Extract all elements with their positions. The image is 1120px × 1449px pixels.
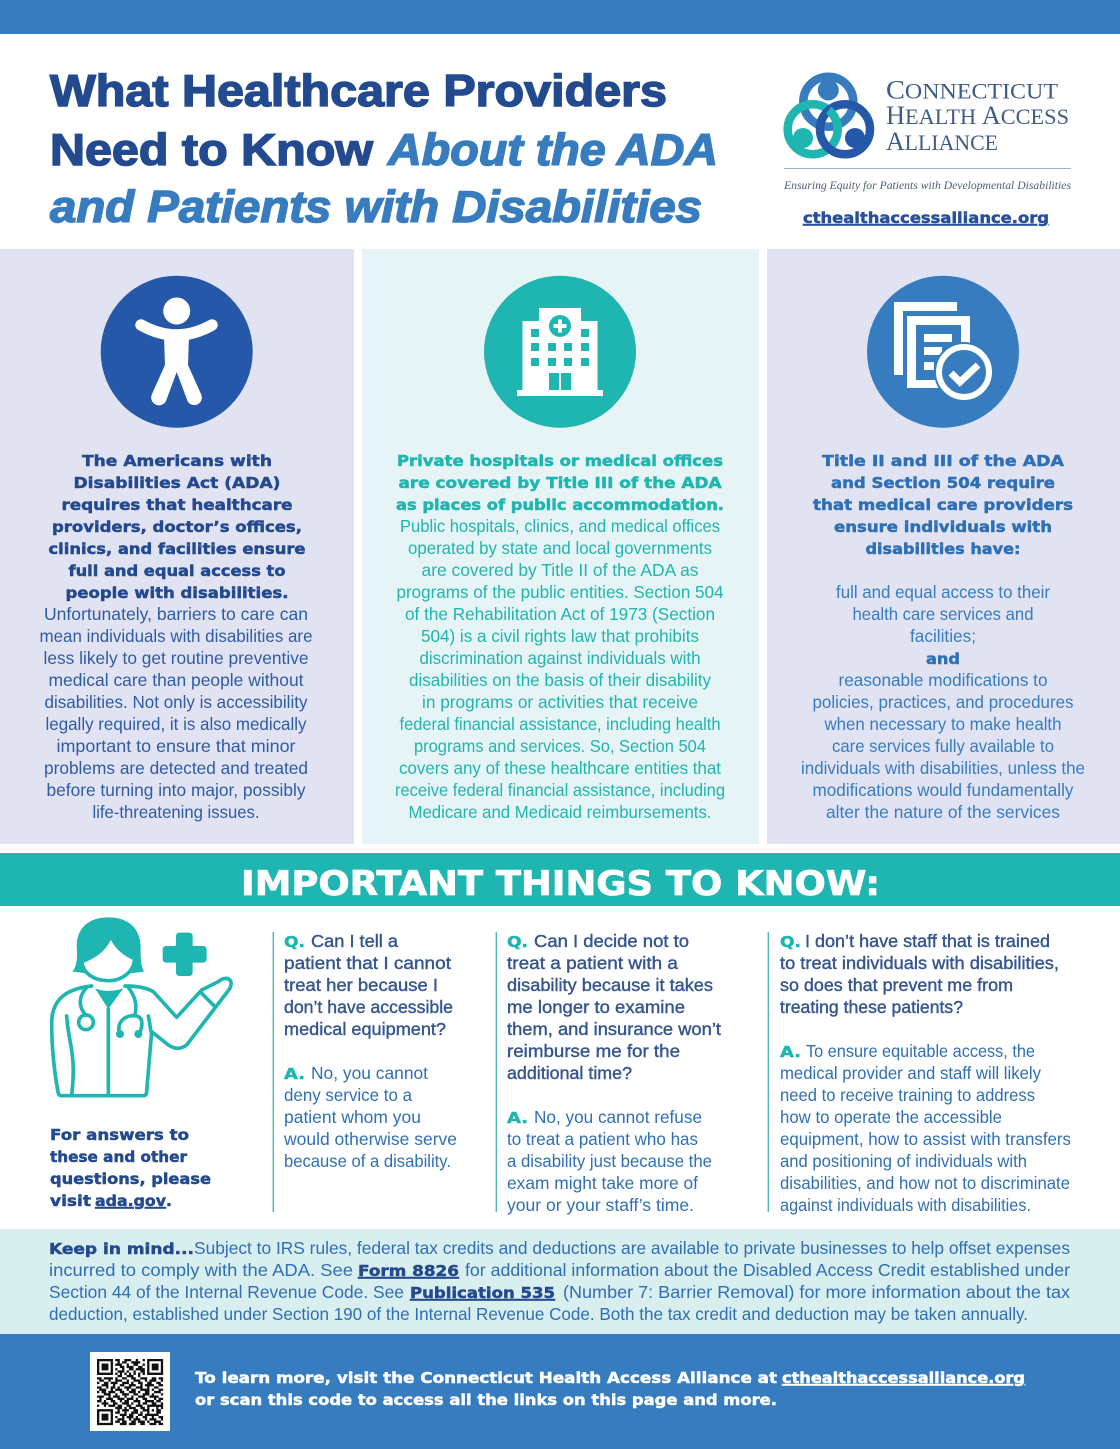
text: for answers visit ada.gov: ada.gov [95,1192,166,1210]
answer 3: need to receive training to address [780,1085,1035,1105]
title [50,67,718,232]
answer 3: disabilities, and how not to discriminate [780,1173,1070,1193]
text: for answers visit ada.gov: these and other [50,1148,187,1166]
body text: mean individuals with disabilities are [40,626,312,646]
body text [40,604,312,822]
body text: 504) is a civil rights law that prohibits [421,626,699,646]
icon: three linked rings [788,77,870,154]
question and answer 3 [768,931,1071,1215]
body text: disabilities. Not only is accessibility [44,692,308,712]
title: and Patients with Disabilities [50,183,702,232]
question 3: treating these patients? [780,997,963,1017]
panel: keep in mind: Form 8826 [358,1262,459,1280]
question 1: don’t have accessible [284,997,453,1017]
answer 3: and positioning of individuals with [780,1151,1027,1171]
heading text [813,452,1073,558]
panel: covered entities [362,249,759,844]
question 3: to treat individuals with disabilities, [780,953,1059,973]
body text: problems are detected and treated [44,758,308,778]
question 3: Q. [780,933,801,951]
body text: Unfortunately, barriers to care can [44,604,308,624]
question 1: patient that I cannot [284,953,451,973]
body text: policies, practices, and procedures [812,692,1074,712]
body text: before turning into major, possibly [46,780,306,800]
heading text [396,452,724,514]
title: Need to Know [50,126,373,175]
question 2 [507,931,721,1083]
panel: keep in mind: for additional information about the Disabled Access Credit established under [465,1260,1070,1280]
answer 3: against individuals with disabilities. [780,1195,1031,1215]
text: for answers visit ada.gov: visit [50,1192,92,1210]
website link: cthealthaccessalliance.org [803,209,1049,227]
answer 1: would otherwise serve [283,1129,457,1149]
footer [0,1334,1120,1449]
question 1: treat her because I [284,975,438,995]
heading text: Private hospitals or medical offices [397,452,723,470]
body text: Medicare and Medicaid reimbursements. [408,802,712,822]
banner: important things to know [0,853,1120,906]
QR code [90,1352,170,1431]
answer 1: because of a disability. [284,1151,451,1171]
question 3 [780,931,1059,1017]
icon: documents with checkmark [867,276,1019,428]
body text: health care services and [852,604,1034,624]
answer 3: equipment, how to assist with transfers [780,1129,1071,1149]
footer call to action [195,1369,1025,1409]
body text: individuals with disabilities, unless the [801,758,1085,778]
logo block [783,76,1071,227]
footer call to action: cthealthaccessalliance.org [782,1369,1025,1387]
panel: keep in mind: Publication 535 [410,1284,555,1302]
panel: keep in mind: Section 44 of the Internal Revenue Code. See [49,1282,404,1302]
heading text: ensure individuals with [834,518,1052,536]
body text: receive federal financial assistance, including [395,780,725,800]
text: for answers visit ada.gov: For answers to [50,1126,189,1144]
footer call to action: To learn more, visit the Connecticut Health Access Alliance at [195,1369,778,1387]
panel: keep in mind: Subject to IRS rules, federal tax credits and deductions are available to private businesses to help offset expenses [194,1238,1070,1258]
answer 2: a disability just because the [507,1151,712,1171]
answer 3: A. [780,1043,801,1061]
body text: programs and services. So, Section 504 [414,736,706,756]
organisation name: ALLIANCE [886,127,998,156]
body text: disabilities on the basis of their disability [409,670,711,690]
heading text: that medical care providers [813,496,1073,514]
question 1: Q. [284,933,305,951]
panel: Title II, III and Section 504 [767,249,1120,844]
heading text: Disabilities Act (ADA) [74,474,280,492]
body text: life-threatening issues. [92,802,260,822]
heading text: The Americans with [82,452,272,470]
heading text: disabilities have: [866,540,1020,558]
panel: keep in mind: incurred to comply with the ADA. See [49,1260,353,1280]
title: About the ADA [387,126,718,175]
body text [801,582,1085,822]
icon: accessibility figure [101,276,253,428]
organisation name: CONNECTICUT [886,76,1059,104]
heading text: Title II and III of the ADA [822,452,1064,470]
question 1: Can I tell a [311,931,398,951]
answer 3: medical provider and staff will likely [780,1063,1041,1083]
body text: of the Rehabilitation Act of 1973 (Section [405,604,715,624]
question 2: Can I decide not to [534,931,689,951]
body text: less likely to get routine preventive [44,648,308,668]
body text: covers any of these healthcare entities that [399,758,721,778]
top bar [0,0,1120,34]
answer 2: your or your staff’s time. [507,1195,694,1215]
banner: important things to know: IMPORTANT THINGS TO KNOW: [241,864,880,904]
question 2: treat a patient with a [507,953,678,973]
text: for answers visit ada.gov [50,1126,211,1210]
answer 2: No, you cannot refuse [534,1107,702,1127]
answer 1 [283,1063,457,1171]
heading text: are covered by Title III of the ADA [398,474,722,492]
heading text: and Section 504 require [831,474,1055,492]
body text: and [926,650,960,668]
body text: programs of the public entities. Section 504 [396,582,724,602]
organisation name [886,76,1069,156]
answer 1: deny service to a [284,1085,412,1105]
icon: doctor with medical cross [52,917,231,1096]
text: for answers visit ada.gov: . [166,1192,172,1210]
body text: operated by state and local governments [408,538,712,558]
body text: discrimination against individuals with [420,648,700,668]
answer 1: A. [284,1065,305,1083]
question 3: so does that prevent me from [780,975,1013,995]
panel: keep in mind: deduction, established under Section 190 of the Internal Revenue Code. Both the tax credit and deduction may be taken annually. [49,1304,1028,1324]
question 2: disability because it takes [507,975,713,995]
heading text: people with disabilities. [66,584,288,602]
body text [395,516,725,822]
question 2: me longer to examine [507,997,685,1017]
body text: alter the nature of the services [826,802,1060,822]
body text: modifications would fundamentally [812,780,1074,800]
footer call to action: or scan this code to access all the links on this page and more. [195,1391,777,1409]
body text: Public hospitals, clinics, and medical offices [400,516,720,536]
body text: are covered by Title II of the ADA as [422,560,699,580]
heading text: as places of public accommodation. [396,496,724,514]
body text: important to ensure that minor [56,736,296,756]
answer 3: how to operate the accessible [780,1107,1002,1127]
answer 2: exam might take more of [507,1173,698,1193]
body text: when necessary to make health [824,714,1062,734]
panel: keep in mind [0,1229,1120,1334]
title: What Healthcare Providers [50,67,667,116]
heading text: providers, doctor’s offices, [52,518,302,536]
heading text: requires that healthcare [62,496,292,514]
icon: hospital [484,276,636,428]
question 1: medical equipment? [284,1019,446,1039]
answer 1: patient whom you [284,1107,421,1127]
answer 1: No, you cannot [311,1063,428,1083]
panel: keep in mind: Keep in mind... [49,1240,194,1258]
body text: facilities; [910,626,976,646]
body text: reasonable modifications to [838,670,1048,690]
text: for answers visit ada.gov: questions, please [50,1170,211,1188]
tagline: Ensuring Equity for Patients with Developmental Disabilities [783,178,1071,192]
answer 3 [780,1041,1071,1215]
question 2: reimburse me for the [507,1041,680,1061]
question 1 [284,931,453,1039]
heading text: clinics, and facilities ensure [48,540,306,558]
answer 2 [507,1107,712,1215]
heading text [48,452,306,602]
answer 3: To ensure equitable access, the [806,1041,1035,1061]
question 2: them, and insurance won’t [507,1019,721,1039]
heading text: full and equal access to [68,562,286,580]
question and answer 1 [273,931,457,1212]
question 3: I don’t have staff that is trained [805,931,1050,951]
answer 2: to treat a patient who has [507,1129,698,1149]
body text: care services fully available to [832,736,1054,756]
body text: federal financial assistance, including health [400,714,720,734]
body text: legally required, it is also medically [46,714,307,734]
question 2: Q. [507,933,528,951]
organisation name: HEALTH ACCESS [886,101,1069,130]
panel: keep in mind: (Number 7: Barrier Removal) for more information about the tax [563,1282,1070,1302]
question 2: additional time? [507,1063,632,1083]
panel: the ADA [0,249,354,844]
body text: full and equal access to their [836,582,1050,602]
question and answer 2 [496,931,721,1215]
answer 2: A. [507,1109,528,1127]
body text: medical care than people without [48,670,304,690]
body text: in programs or activities that receive [422,692,698,712]
